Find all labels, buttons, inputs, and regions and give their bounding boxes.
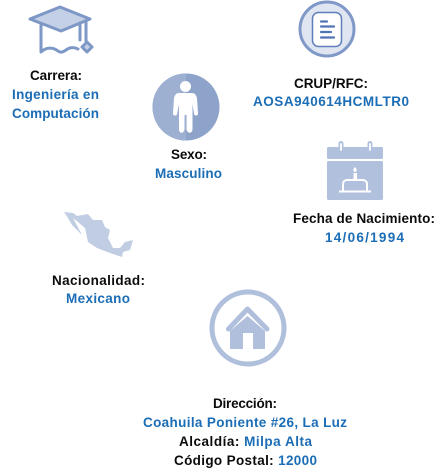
panel: carrera: [12, 7, 99, 121]
value: carrera: Computación: [12, 106, 99, 121]
panel: nacionalidad: [52, 212, 145, 306]
value: carrera: Ingeniería en: [12, 87, 99, 102]
panel: sexo: [152, 74, 222, 181]
heading: sexo: Sexo:: [171, 147, 207, 162]
heading: carrera: Carrera:: [30, 68, 82, 83]
heading: nacionalidad: Nacionalidad:: [52, 273, 145, 288]
icon: document in circle: [300, 2, 354, 56]
icon: house in circle: [212, 292, 284, 364]
heading: fecha de nacimiento: Fecha de Nacimiento:: [293, 211, 435, 226]
icon: map of Mexico: [64, 212, 133, 257]
value: nacionalidad: Mexicano: [66, 291, 130, 306]
value: curp rfc: AOSA940614HCMLTR0: [253, 94, 409, 109]
panel: direccion: [143, 292, 347, 468]
value: sexo: Masculino: [155, 166, 222, 181]
value: postal code: Código Postal: 12000: [174, 453, 317, 468]
panel: fecha de nacimiento: [293, 144, 435, 245]
icon: birthday calendar: [327, 144, 383, 200]
value: alcaldia: Alcaldía: Milpa Alta: [179, 434, 312, 449]
icon: graduation cap: [30, 7, 92, 52]
heading: curp rfc: CRUP/RFC:: [294, 76, 368, 91]
heading: direccion: Dirección:: [213, 396, 277, 411]
value: fecha de nacimiento: 14/06/1994: [325, 230, 404, 245]
value: street: Coahuila Poniente #26, La Luz: [143, 415, 347, 430]
panel: curp rfc: [253, 2, 409, 109]
value: carrera: [12, 87, 99, 121]
icon: person in circle: [152, 74, 220, 140]
